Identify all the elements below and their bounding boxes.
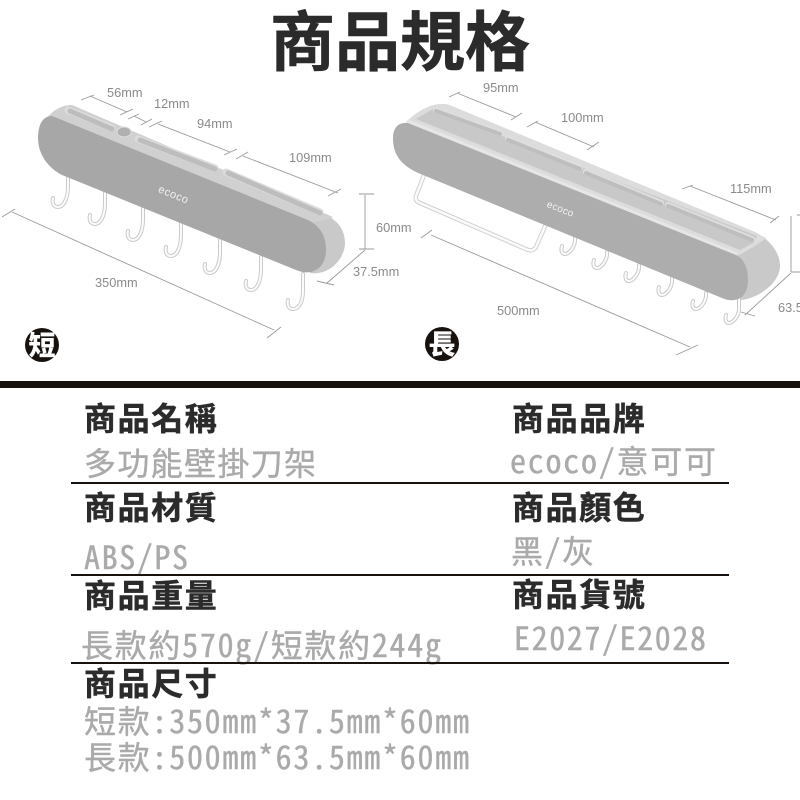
spec: size: 短款:350mm*37.5mm*60mm — [84, 697, 469, 743]
spec: item number: E2027/E2028 — [514, 614, 706, 660]
spec: brand: ecoco/意可可 — [510, 437, 716, 483]
dimension labels: long: 95mm — [483, 80, 519, 95]
dimension labels: short — [95, 85, 412, 290]
spec: colour: 黑/灰 — [511, 527, 594, 573]
dimension labels: short: 94mm — [197, 116, 233, 131]
rack top surface: long — [406, 104, 766, 256]
spec: product name: 商品名稱 — [84, 394, 218, 440]
spec: item number — [512, 570, 706, 660]
spec: colour — [511, 483, 646, 573]
panel: long rack diagram — [393, 80, 800, 362]
dimension labels: short: 60mm — [376, 220, 412, 235]
spec: product name: 多功能壁掛刀架 — [84, 439, 316, 485]
dimension lines: short — [2, 95, 374, 338]
rack top surface: short — [47, 105, 333, 222]
towel bar: long — [416, 175, 546, 250]
dimension labels: long: 500mm — [497, 303, 540, 318]
hooks: short rack — [53, 174, 303, 309]
knife slots: short — [68, 110, 320, 213]
spec: product name — [84, 394, 316, 485]
knife slots: long — [436, 110, 752, 240]
front lip: long — [408, 121, 737, 254]
spec: material: 商品材質 — [84, 483, 218, 529]
recess: long — [416, 109, 757, 250]
spec: colour: 商品顏色 — [512, 483, 646, 529]
panel: short rack diagram — [2, 85, 412, 363]
dimension labels: short: 109mm — [289, 150, 332, 165]
spec: weight: 商品重量 — [84, 571, 218, 617]
spec: weight: 長款約570g/短款約244g — [81, 621, 441, 667]
rack front face: short — [38, 116, 326, 272]
spec: size — [84, 659, 469, 779]
dimension labels: long: 115mm — [730, 181, 772, 196]
rack body: long — [406, 104, 780, 300]
spec: weight — [81, 571, 441, 667]
spec: material — [84, 483, 218, 579]
dimension labels: short: 350mm — [95, 275, 138, 290]
dimension labels: short: 37.5mm — [353, 264, 399, 279]
hooks: long — [561, 238, 739, 323]
dimension labels: long — [483, 80, 800, 318]
dimension lines: long — [421, 92, 800, 355]
spec: item number: 商品貨號 — [512, 570, 646, 616]
spec: brand — [510, 394, 716, 483]
rack front face: long — [393, 123, 748, 300]
dimension labels: short: 12mm — [154, 96, 190, 111]
dimension labels: long: 100mm — [561, 110, 604, 125]
divider bar — [0, 381, 800, 388]
spec: size: 商品尺寸 — [84, 659, 218, 705]
spec table — [71, 394, 729, 779]
logo: long: ecoco — [545, 199, 575, 220]
logo: short: ecoco — [156, 184, 190, 207]
badge: long: 長 — [428, 323, 456, 362]
dimension labels: short: 56mm — [107, 85, 143, 100]
rack body: short — [47, 105, 345, 273]
spec: material: ABS/PS — [84, 533, 188, 579]
badge: short: 短 — [28, 324, 56, 363]
spec: brand: 商品品牌 — [512, 394, 646, 440]
spec: size: 長款:500mm*63.5mm*60mm — [84, 733, 469, 779]
